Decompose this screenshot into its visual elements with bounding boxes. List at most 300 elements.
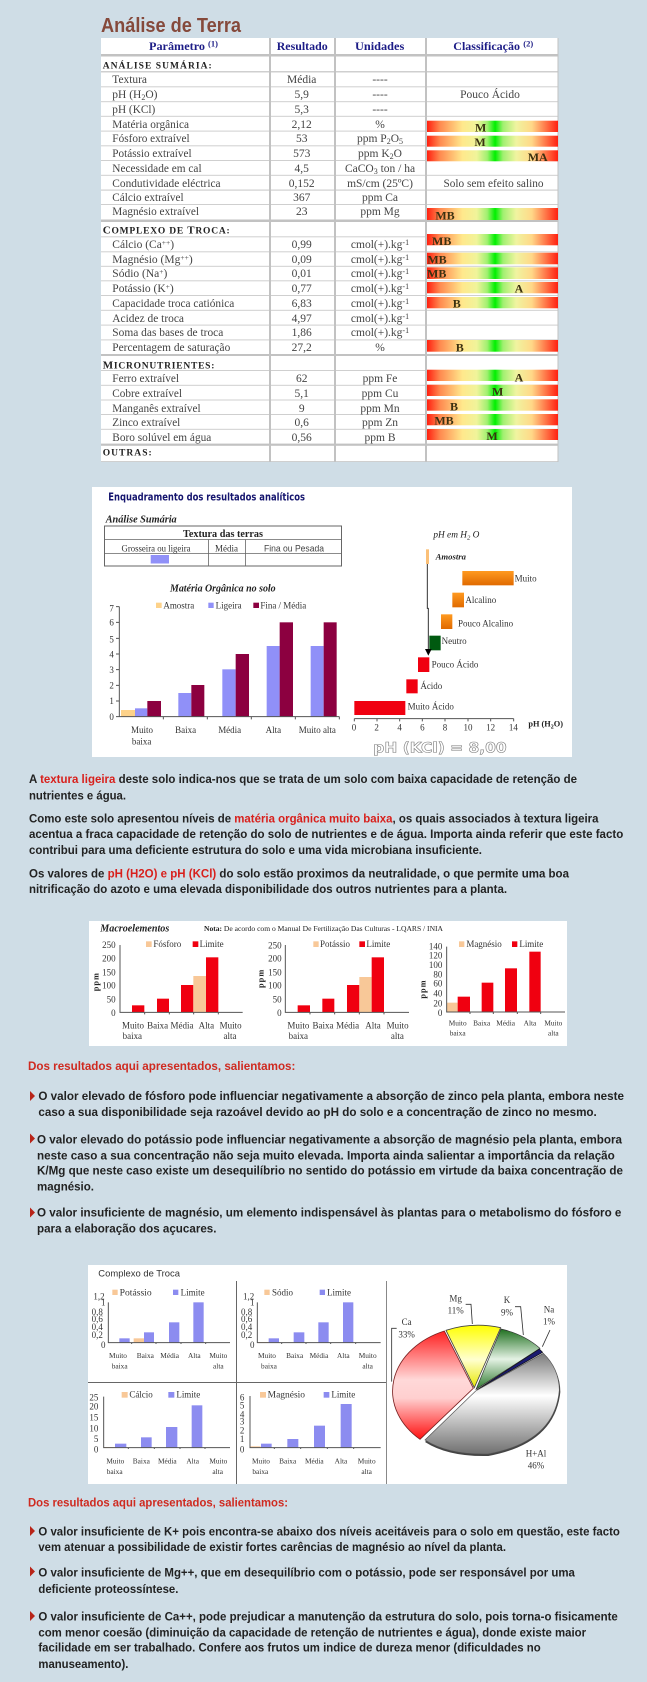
section heading: results macro: Dos resultados aqui apresentados, salientamos: (28, 1059, 295, 1073)
rows: micronutrientes: Ferro extraível (112, 373, 179, 385)
rows: micronutrientes: Boro solúvel em água (112, 432, 211, 444)
chart: potássio: Muito (387, 1020, 409, 1030)
classification gradient bars: B (456, 340, 464, 354)
rows: análise sumária: ppm Mg (360, 206, 400, 218)
soil texture table: Grosseira ou ligeira (122, 543, 190, 553)
rows: análise sumária: % (375, 119, 385, 131)
bullet list: macroelementos (30, 1089, 624, 1236)
rows: complexo de troca: Magnésio (Mg (112, 254, 180, 266)
chart: pH em água: 12 (486, 722, 495, 732)
rows: complexo de troca: ++ (180, 253, 189, 262)
rows: análise sumária: 367 (293, 192, 311, 204)
rows: micronutrientes: Cobre extraível (112, 388, 182, 400)
rows: complexo de troca: ) (189, 254, 193, 266)
chart: magnésio: Magnésio (268, 1390, 306, 1400)
chart: sódio: Alta (337, 1351, 350, 1360)
chart: potássio: 150 (268, 967, 282, 977)
chart: potássio: Alta (188, 1351, 201, 1360)
chart: pH em água: pH em H (433, 531, 467, 541)
chart: magnésio: 0 (240, 1444, 245, 1454)
classification gradient bars (427, 120, 558, 443)
rows: complexo de troca: cmol(+).kg (351, 298, 402, 310)
chart: sódio: Limite (327, 1287, 351, 1297)
chart: magnésio (419, 939, 565, 1038)
rows: análise sumária: 573 (293, 148, 311, 160)
chart: magnésio: 60 (433, 979, 443, 989)
rows: análise sumária: ppm K (358, 148, 390, 160)
rows: análise sumária: Magnésio extraível (112, 206, 199, 218)
chart: matéria orgânica no solo: Matéria Orgânica no solo (169, 584, 276, 595)
section heading: complexo de troca: COMPLEXO DE TROCA: (103, 225, 230, 237)
rows: complexo de troca: + (166, 282, 170, 291)
chart: exchange complex pie: Mg (449, 1293, 462, 1303)
chart: matéria orgânica no solo: 4 (109, 649, 114, 659)
chart: potássio: Média (336, 1020, 359, 1030)
chart: magnésio: alta (548, 1029, 559, 1038)
chart: magnésio: ppm (419, 979, 428, 999)
chart: magnésio: 80 (433, 969, 443, 979)
rows: análise sumária: O (391, 133, 399, 145)
chart: matéria orgânica no solo: 3 (109, 665, 114, 675)
chart: pH em água: 2 (467, 535, 471, 542)
chart: matéria orgânica no solo: 0 (109, 712, 114, 722)
table header row: (1) (208, 38, 218, 48)
rows: análise sumária: O) (145, 89, 158, 101)
chart: potássio: Limite (181, 1287, 205, 1297)
chart: fósforo: 100 (102, 981, 116, 991)
chart: fósforo: Muito (220, 1020, 242, 1030)
text block: soil interpretation: Os valores de pH (H2O) e pH (KCl) do solo estão proximos da neutralidade, o que permite uma boa (29, 866, 569, 880)
bullet list: exchange complex: manuseamento). (38, 1657, 128, 1671)
chart: potássio: Limite (366, 939, 390, 949)
classification gradient bars: MB (427, 252, 447, 266)
chart: cálcio: 15 (89, 1412, 99, 1422)
chart: sódio: Muito (359, 1351, 377, 1360)
chart: matéria orgânica no solo: 7 (109, 603, 114, 613)
rows: complexo de troca: + (159, 267, 164, 276)
chart: magnésio: Baixa (279, 1456, 297, 1465)
chart: matéria orgânica no solo: Média (218, 725, 241, 735)
rows: análise sumária: ton / ha (378, 163, 415, 175)
table header row: Unidades (355, 39, 405, 53)
rows: micronutrientes: ppm Cu (362, 388, 399, 400)
rows: complexo de troca: Percentagem de saturação (112, 342, 231, 354)
text block: soil interpretation: contribui para uma deficiente estrutura do solo e uma vida microbiana insuficiente. (29, 843, 482, 857)
bullet list: exchange complex: O valor insuficiente de Ca++, pode prejudicar a manutenção da estrutura do solo, pois torna-o fisicamente (38, 1610, 618, 1624)
chart: cálcio: Alta (186, 1456, 200, 1465)
chart: sódio: 0,4 (241, 1322, 253, 1332)
bullet list: macroelementos: para a elaboração dos açucares. (37, 1222, 216, 1236)
chart: potássio: Baixa (313, 1020, 333, 1030)
chart: pH em água: Muito (515, 574, 537, 584)
chart: pH em água (352, 531, 563, 732)
note: Nota: De acordo com o Manual De Fertilização Das Culturas - LQARS / INIA (204, 924, 444, 933)
rows: análise sumária: 0,152 (289, 178, 315, 190)
panel: analytical framing (92, 487, 572, 757)
rows: micronutrientes: 0,6 (295, 417, 309, 429)
chart: magnésio: baixa (450, 1029, 466, 1038)
chart: cálcio (89, 1390, 230, 1476)
soil texture table: Média (215, 543, 238, 553)
chart: cálcio: Baixa (133, 1456, 151, 1465)
panel: soil analysis table (101, 38, 558, 462)
classification gradient bars: MB (434, 413, 454, 427)
bullet list: macroelementos: caso a sua disponibilidade seja razoável devido ao pH do solo e a concentração de zinco no mesmo. (38, 1105, 597, 1119)
icon: bullet 1 (30, 1091, 35, 1101)
classification gradient bars: A (515, 282, 524, 296)
chart: fósforo: Fósforo (153, 939, 182, 949)
classification gradient bars: MB (432, 234, 451, 248)
rows: análise sumária: Cálcio extraível (112, 192, 184, 204)
chart: fósforo: Alta (199, 1020, 214, 1030)
panel heading: Complexo de Troca (98, 1268, 181, 1280)
chart: magnésio: Limite (331, 1390, 355, 1400)
rows: análise sumária: Necessidade em cal (112, 163, 202, 175)
chart: potássio: Baixa (137, 1351, 155, 1360)
classification gradient bars: M (486, 429, 498, 443)
chart: magnésio: Muito (449, 1019, 467, 1028)
chart: matéria orgânica no solo: Muito alta (299, 725, 336, 735)
rows: complexo de troca: -1 (402, 253, 409, 262)
rows: complexo de troca: cmol(+).kg (351, 268, 402, 280)
rows: complexo de troca: Potássio (K (112, 283, 166, 295)
chart: pH em água: Muito Ácido (408, 701, 454, 711)
chart: sódio (241, 1287, 381, 1371)
bullet list: macroelementos: K/Mg que neste caso existe um desequilíbrio no sentido do potássio em virtude da baixa concentração de (37, 1164, 623, 1178)
chart: matéria orgânica no solo: Alta (266, 725, 281, 735)
chart: matéria orgânica no solo: 6 (109, 618, 114, 628)
rows: micronutrientes (112, 373, 400, 444)
rows: complexo de troca: 1,86 (292, 327, 312, 339)
bullet list: exchange complex (30, 1525, 620, 1671)
subheading: análise sumária: Análise Sumária (105, 514, 177, 526)
rows: análise sumária: ppm P (357, 133, 387, 145)
chart: cálcio: alta (212, 1467, 224, 1476)
chart: pH em água: pH (H (528, 719, 551, 728)
chart: magnésio: 6 (240, 1393, 245, 1403)
chart: fósforo: 150 (102, 967, 116, 977)
chart: magnésio: 140 (429, 942, 443, 952)
chart: potássio (92, 1287, 230, 1371)
icon: bullet 2 (30, 1134, 35, 1144)
chart: potássio: alta (391, 1031, 404, 1041)
bullet list: exchange complex: O valor insuficiente de K+ pois encontra-se abaixo dos níveis aceitáveis para o solo em questão, este facto (38, 1525, 620, 1539)
bullet list: macroelementos: neste caso a sua concentração não seja muito elevada. Importa ainda salientar a importância da relação (37, 1148, 615, 1162)
chart: cálcio: Limite (176, 1390, 200, 1400)
rows: análise sumária: 4,5 (295, 163, 309, 175)
rows: complexo de troca: % (375, 342, 385, 354)
bullet list: exchange complex: deficiente proteossíntese. (38, 1582, 178, 1596)
chart: exchange complex pie: K (504, 1295, 511, 1305)
text block: soil interpretation: Como este solo apresentou níveis de matéria orgânica muito baixa, os quais associados à textura ligeira (29, 811, 599, 825)
rows: complexo de troca: cmol(+).kg (351, 313, 402, 325)
rows: micronutrientes: ppm B (364, 432, 396, 444)
chart: fósforo: Média (171, 1020, 193, 1030)
chart: fósforo: 0 (111, 1008, 116, 1018)
chart: sódio: 0,2 (241, 1330, 252, 1340)
chart: magnésio: Média (305, 1456, 324, 1465)
rows: complexo de troca: 0,77 (292, 283, 312, 295)
chart: matéria orgânica no solo: Ligeira (216, 600, 242, 610)
rows: complexo de troca: 27,2 (292, 342, 312, 354)
rows: micronutrientes: ppm Zn (362, 417, 398, 429)
chart: exchange complex pie: H+Al (526, 1449, 547, 1459)
chart: matéria orgânica no solo: 1 (109, 696, 114, 706)
rows: análise sumária: Condutividade eléctrica (112, 178, 221, 190)
chart: pH em água: Pouco Ácido (432, 659, 479, 669)
chart: magnésio: 3 (240, 1417, 245, 1427)
rows: análise sumária (112, 74, 544, 218)
chart: fósforo: 50 (107, 995, 116, 1005)
chart: pH em água: 8 (443, 722, 448, 732)
soil texture table: Textura das terras (183, 528, 264, 540)
chart: magnésio: 0 (438, 1008, 443, 1018)
rows: complexo de troca: -1 (402, 282, 409, 291)
icon: bullet 3 (30, 1611, 35, 1621)
chart: potássio: 100 (268, 981, 282, 991)
rows: micronutrientes: ppm Fe (363, 373, 397, 385)
chart: sódio: Sódio (272, 1287, 293, 1297)
chart: fósforo: baixa (123, 1031, 142, 1041)
rows: análise sumária: ---- (372, 104, 388, 116)
chart: fósforo: ppm (91, 972, 100, 991)
chart: magnésio: 20 (433, 998, 443, 1008)
rows: complexo de troca: Capacidade troca catiónica (112, 298, 234, 310)
rows: análise sumária: 5 (399, 137, 403, 146)
title: Análise de Terra (101, 15, 242, 37)
rows: análise sumária: ---- (372, 89, 388, 101)
rows: complexo de troca: cmol(+).kg (351, 239, 402, 251)
rows: análise sumária: 5,9 (295, 89, 309, 101)
classification gradient bars: A (515, 370, 524, 384)
chart: potássio: 0 (101, 1340, 106, 1350)
chart: cálcio: 20 (89, 1402, 99, 1412)
chart: potássio: baixa (289, 1031, 308, 1041)
table header row (149, 38, 533, 53)
chart: magnésio: Magnésio (466, 939, 502, 949)
chart: matéria orgânica no solo: baixa (132, 737, 151, 747)
chart: exchange complex pie: Ca (402, 1317, 412, 1327)
chart: magnésio: 4 (240, 1409, 245, 1419)
chart: sódio: 0 (250, 1340, 255, 1350)
rows: análise sumária: Textura (112, 74, 147, 86)
chart: cálcio: Cálcio (129, 1390, 153, 1400)
chart: pH em água: 2 (374, 722, 379, 732)
rows: micronutrientes: 9 (299, 403, 305, 415)
chart: magnésio: 120 (429, 950, 443, 960)
text block: soil interpretation: A textura ligeira deste solo indica-nos que se trata de um solo com baixa capacidade de retenção de (29, 772, 577, 786)
chart: potássio: 0,6 (92, 1314, 103, 1324)
chart: matéria orgânica no solo: 5 (109, 634, 114, 644)
text block: soil interpretation: nitrificação do azoto e uma elevada disponibilidade dos outros nutrientes para a planta. (29, 882, 507, 896)
table header row: (2) (523, 38, 533, 48)
rows: análise sumária: 2,12 (292, 119, 312, 131)
rows: complexo de troca: -1 (402, 267, 409, 276)
chart: exchange complex pie (392, 1293, 560, 1471)
section heading: results exchange complex: Dos resultados aqui apresentados, salientamos: (28, 1496, 288, 1510)
chart: magnésio: Muito (358, 1456, 376, 1465)
chart: matéria orgânica no solo: Amostra (163, 600, 194, 610)
table header row: Parâmetro (149, 39, 205, 53)
chart: magnésio: alta (361, 1467, 373, 1476)
chart: magnésio: Muito (544, 1019, 563, 1028)
classification gradient bars: M (492, 384, 503, 398)
text block: soil interpretation: acentua a fraca capacidade de retenção do solo de nutrientes e de água. Importa ainda referir que este facto (29, 827, 623, 841)
chart: magnésio (240, 1390, 381, 1476)
rows: complexo de troca: 0,09 (292, 254, 312, 266)
chart: magnésio: 1 (240, 1434, 244, 1444)
chart: sódio: 0,6 (241, 1314, 253, 1324)
chart: potássio: Potássio (120, 1287, 152, 1297)
chart: pH em água: 14 (509, 722, 518, 732)
classification gradient bars: M (475, 120, 486, 134)
icon: bullet 3 (30, 1208, 35, 1218)
chart: potássio: 0 (277, 1008, 282, 1018)
chart: pH em água: O (470, 531, 480, 541)
chart: sódio: Muito (258, 1351, 276, 1360)
section heading: micronutrientes: MICRONUTRIENTES: (103, 359, 214, 371)
bullet list: exchange complex: vem atenuar a possibilidade de existir fortes carências de magnésio ao nível da planta. (38, 1540, 506, 1554)
rows: análise sumária: 23 (296, 206, 308, 218)
bullet list: exchange complex: O valor insuficiente de Mg++, que em desequilíbrio com o potássio, pode ser responsável por uma (38, 1565, 575, 1579)
chart: potássio: alta (213, 1362, 224, 1371)
chart: magnésio: 2 (240, 1425, 244, 1435)
chart: magnésio: 5 (240, 1401, 245, 1411)
chart: pH em água: Amostra (435, 551, 467, 561)
chart: potássio: Alta (365, 1020, 381, 1030)
rows: complexo de troca: Sódio (Na (112, 268, 159, 280)
chart: sódio: Média (310, 1351, 329, 1360)
rows: complexo de troca: -1 (402, 326, 409, 335)
rows: complexo de troca: ++ (162, 238, 170, 247)
rows: análise sumária: 3 (374, 167, 378, 176)
rows: micronutrientes: Zinco extraível (112, 417, 180, 429)
chart: potássio: 250 (268, 941, 282, 951)
classification gradient bars: B (450, 399, 458, 413)
rows: análise sumária: Fósforo extraível (112, 133, 190, 145)
chart: potássio: Muito (209, 1351, 228, 1360)
chart: magnésio: Alta (335, 1456, 348, 1465)
chart: cálcio: Muito (106, 1456, 125, 1465)
chart: magnésio: Limite (519, 939, 543, 949)
chart: pH em água: Alcalino (465, 595, 497, 605)
rows: complexo de troca: 4,97 (292, 313, 312, 325)
chart: potássio: 0,2 (92, 1330, 103, 1340)
chart: pH em água: Neutro (442, 636, 467, 646)
classification gradient bars: MB (435, 208, 455, 222)
chart: pH em água: 2 (551, 724, 554, 730)
section heading: outras: OUTRAS: (103, 449, 152, 459)
chart: potássio: 200 (268, 953, 282, 963)
chart: sódio: alta (362, 1362, 374, 1371)
rows: complexo de troca: ) (164, 268, 168, 280)
rows: análise sumária: Pouco Ácido (460, 87, 520, 101)
chart: cálcio: 25 (89, 1392, 99, 1402)
table header row: Classificação (453, 39, 520, 53)
rows: análise sumária: mS/cm (25ºC) (347, 178, 413, 190)
bullet list: macroelementos: magnésio. (37, 1180, 94, 1194)
rows: micronutrientes: ppm Mn (360, 403, 400, 415)
icon: bullet 2 (30, 1566, 35, 1576)
chart: pH em água: O) (554, 719, 563, 728)
rows: análise sumária: CaCO (345, 163, 374, 175)
classification gradient bars: B (453, 296, 461, 310)
chart: cálcio: 0 (94, 1445, 99, 1455)
chart: matéria orgânica no solo (109, 584, 339, 747)
text block: soil interpretation: nutrientes e água. (29, 789, 126, 803)
chart: potássio: Média (160, 1351, 180, 1360)
chart: sódio: 1,2 (243, 1291, 254, 1301)
chart: matéria orgânica no solo: Fina / Média (260, 600, 306, 610)
chart: potássio: Muito (287, 1020, 310, 1030)
chart: fósforo: 200 (102, 953, 116, 963)
chart: pH em água: 4 (397, 722, 402, 732)
icon: bullet 1 (30, 1526, 35, 1536)
panel: macroelementos (89, 921, 567, 1046)
chart: sódio: 0,8 (241, 1307, 253, 1317)
chart: fósforo (91, 939, 243, 1041)
value: pH KCl: pH (KCl) = 8,00 (373, 740, 507, 756)
bullet list: macroelementos: O valor insuficiente de magnésio, um elemento indispensável às plantas para o metabolismo do fósforo e (37, 1206, 622, 1220)
chart: sódio: baixa (261, 1362, 278, 1371)
chart: potássio (256, 939, 409, 1041)
chart: potássio: 0,4 (92, 1322, 103, 1332)
chart: exchange complex pie: 46% (528, 1461, 545, 1471)
rows: micronutrientes: 5,1 (295, 388, 309, 400)
rows: complexo de troca: -1 (402, 238, 409, 247)
arrow from sample to pH class (425, 564, 432, 656)
chart: cálcio: 5 (94, 1434, 99, 1444)
soil texture table (104, 526, 342, 566)
chart: cálcio: baixa (107, 1467, 123, 1476)
section heading: análise sumária: ANÁLISE SUMÁRIA: (103, 59, 212, 71)
chart: pH em água: Ácido (420, 681, 443, 691)
chart: pH em água: 6 (420, 722, 425, 732)
chart: cálcio: Muito (209, 1456, 228, 1465)
chart: matéria orgânica no solo: Muito (131, 725, 153, 735)
chart: potássio: Potássio (320, 939, 350, 949)
bullet list: exchange complex: com menor coesão (diminuição da capacidade de retenção de nutrientes e água), donde existe maior (38, 1626, 586, 1640)
chart: potássio: 0,8 (92, 1307, 103, 1317)
rows: complexo de troca: Soma das bases de troca (112, 327, 223, 339)
rows: complexo de troca: cmol(+).kg (351, 327, 402, 339)
chart: magnésio: Alta (524, 1019, 537, 1028)
rows: complexo de troca: ) (170, 283, 174, 295)
chart: fósforo: alta (224, 1031, 236, 1041)
chart: magnésio: Média (496, 1019, 516, 1028)
chart: exchange complex pie: 33% (398, 1329, 415, 1339)
soil texture table: Fina ou Pesada (264, 543, 324, 553)
chart: fósforo: Muito (122, 1020, 144, 1030)
rows: análise sumária: pH (KCl) (112, 104, 155, 116)
rows: análise sumária: 2 (390, 152, 394, 161)
chart: fósforo: 250 (102, 940, 116, 950)
chart: potássio: baixa (112, 1362, 128, 1371)
chart: magnésio: baixa (252, 1467, 269, 1476)
bullet list: macroelementos: O valor elevado do potássio pode influenciar negativamente a absorção de magnésio pela planta, embora (37, 1132, 622, 1146)
rows: micronutrientes: 62 (296, 373, 308, 385)
rows: análise sumária: ---- (372, 74, 388, 86)
rows: complexo de troca: cmol(+).kg (351, 283, 402, 295)
chart: magnésio: Baixa (473, 1019, 491, 1028)
panel heading: Enquadramento dos resultados analíticos (108, 492, 305, 504)
chart: sódio: Baixa (286, 1351, 304, 1360)
chart: potássio: Muito (109, 1351, 127, 1360)
text block: soil interpretation (29, 772, 623, 896)
rows: análise sumária: 5,3 (295, 104, 309, 116)
rows: complexo de troca: ) (170, 239, 174, 251)
chart: potássio: 1,2 (93, 1291, 105, 1301)
